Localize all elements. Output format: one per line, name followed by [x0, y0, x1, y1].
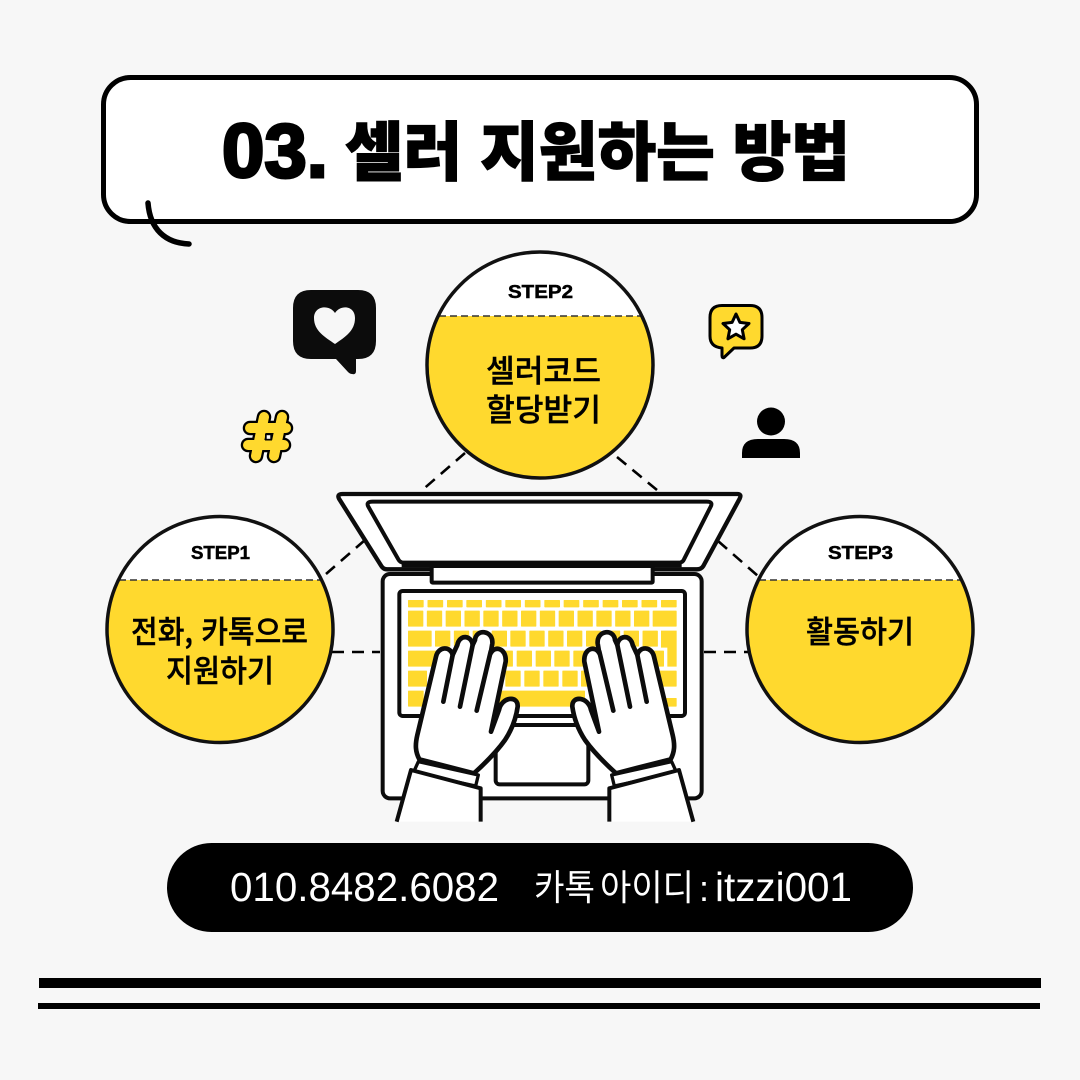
- icon: person: [742, 408, 800, 458]
- step 1 text: 지원하기: [166, 646, 274, 691]
- icon: heart speech bubble: [293, 290, 376, 374]
- panel: step 1: [107, 516, 333, 743]
- laptop illustration: [338, 494, 740, 822]
- step 2 label: STEP2: [508, 281, 573, 302]
- right hand: [572, 632, 693, 822]
- laptop base: [383, 574, 702, 798]
- step 1 label: STEP1: [191, 543, 250, 563]
- kakao id: :: [699, 868, 709, 909]
- keyboard: [399, 591, 685, 716]
- phone number: 010.8482.6082: [230, 864, 499, 910]
- kakao id: 아이디: [600, 859, 694, 911]
- step 3 text: 활동하기: [806, 607, 914, 652]
- step 3 label: STEP3: [828, 542, 893, 563]
- kakao id: itzzi001: [715, 864, 852, 910]
- icon: hashtag: [248, 417, 286, 456]
- laptop hinge: [432, 566, 653, 583]
- step 1 text: [131, 607, 308, 691]
- step 2 text: [486, 346, 601, 430]
- dashed connectors: [326, 453, 758, 652]
- panel: step 2: [427, 252, 653, 479]
- title speech bubble: [104, 78, 976, 244]
- left hand: [397, 632, 518, 822]
- laptop lid: [338, 494, 740, 569]
- footer rules: [38, 978, 1041, 1009]
- step 1 text: 전화, 카톡으로: [131, 607, 308, 652]
- step 2 text: 할당받기: [486, 385, 601, 430]
- kakao id: [534, 859, 852, 911]
- title: 03.: [222, 109, 328, 194]
- title: 셀러 지원하는 방법: [345, 102, 850, 194]
- kakao id: 카톡: [534, 859, 595, 911]
- trackpad: [496, 718, 588, 784]
- icon: star speech bubble: [710, 306, 762, 358]
- contact pill: [167, 843, 913, 932]
- panel: step 3: [747, 516, 973, 743]
- step 2 text: 셀러코드: [486, 346, 601, 391]
